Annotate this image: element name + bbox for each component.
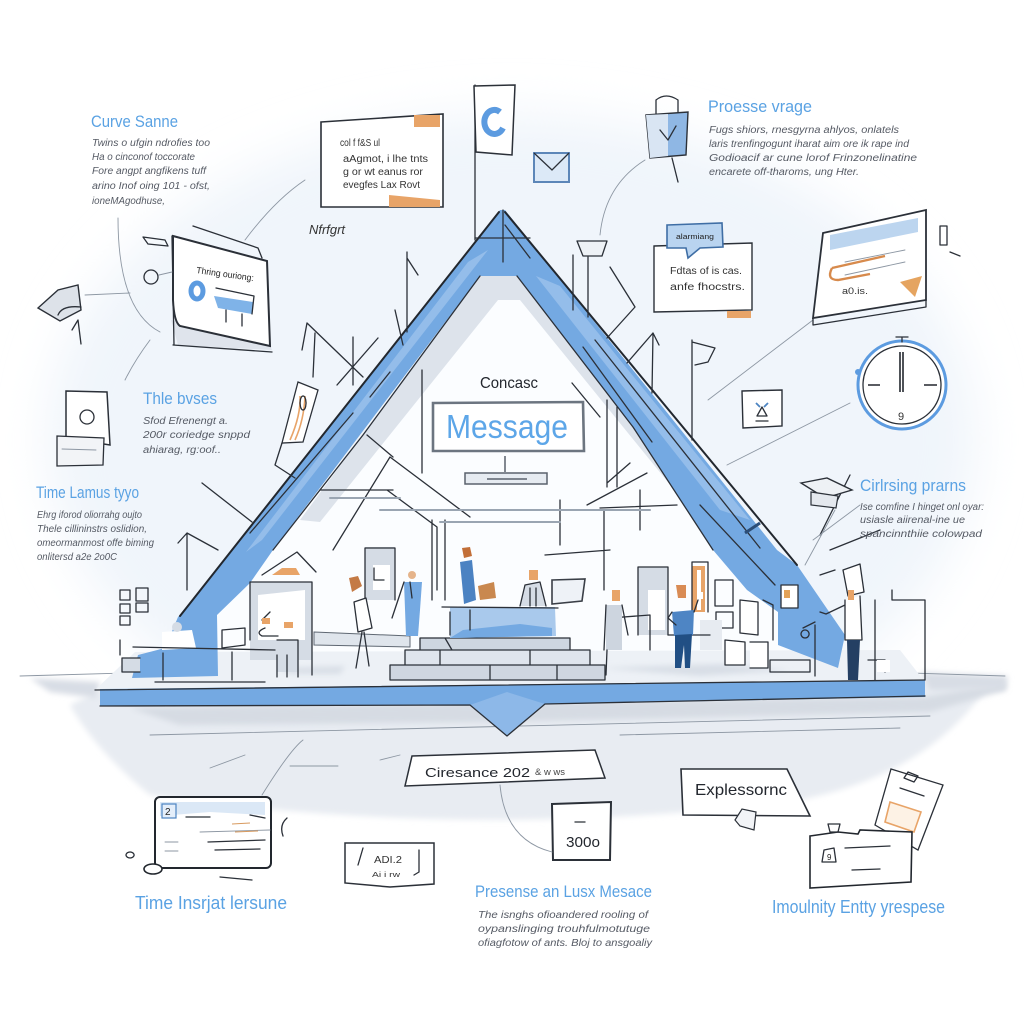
person: woman right of steps [604, 590, 628, 675]
sketch struts around roof [178, 241, 715, 590]
sign stand [465, 456, 547, 484]
note box [345, 843, 434, 887]
person: seated figure [478, 582, 496, 600]
speech card right top: alarmiang [676, 234, 714, 241]
poster on strut [282, 382, 318, 443]
reception counter [442, 579, 585, 638]
clipboard and folder icon [810, 769, 943, 888]
person: woman standing left [349, 576, 372, 668]
people [349, 547, 864, 680]
text block: cirlrsing prarns [860, 476, 984, 540]
message frame [433, 402, 584, 451]
label: concise: Concasc [480, 375, 538, 392]
3000 card [500, 785, 611, 860]
icon: wall clock [855, 337, 946, 429]
connector lines top right [600, 160, 860, 565]
text block: curve sanne: Curve Sanne [91, 112, 178, 131]
caption: time insrjat lersune: Time Insrjat lersune [135, 893, 287, 913]
note card top: evegfes Lax Rovt [343, 180, 420, 191]
person: man behind counter [520, 570, 546, 606]
icon: envelope [534, 153, 569, 182]
left chart board: Thring ouriong: [196, 265, 255, 283]
text block: proesse vrage: Fugs shiors, rnesgyrna ahlyos, onlatels [709, 125, 899, 136]
handwritten note: Nfrfgrt [309, 222, 346, 237]
platform floor [95, 650, 925, 690]
note card top: aAgmot, i lhe tnts [343, 154, 428, 165]
card bottom left [126, 740, 303, 880]
note box: ADI.2 [374, 855, 402, 866]
text block: thle bvses: ahiarag, rg:oof.. [143, 445, 221, 456]
clipboard and folder icon: 9 [827, 853, 832, 862]
note card top: g or wt eanus ror [343, 167, 424, 178]
text block: proesse vrage [708, 97, 918, 178]
speech card right top: anfe fhocstrs. [670, 282, 745, 293]
text block: presense an lusx mesace: ofiagfotow of ants. Bloj to ansgoaliy [478, 938, 653, 949]
text block: curve sanne [91, 112, 210, 207]
text block: thle bvses: Thle bvses [143, 389, 217, 408]
text block: time lamus: onlitersd a2e 2o0C [37, 552, 118, 563]
triangular roof frame [132, 210, 845, 678]
ground plane [20, 672, 1008, 820]
text block: proesse vrage: Proesse vrage [708, 97, 812, 116]
text block: curve sanne: Ha o cinconof toccorate [92, 152, 195, 163]
text block: time lamus: Thele cillininstrs oslidion, [37, 524, 147, 535]
text block: curve sanne: Twins o ufgin ndrofies too [92, 138, 210, 149]
flag pole [474, 85, 515, 240]
note card top [309, 114, 443, 237]
text block: proesse vrage: encarete off-tharoms, ung Hter. [709, 167, 859, 178]
floor shadow [280, 664, 790, 676]
icon: wall clock: 9 [898, 411, 904, 423]
text block: thle bvses: 200r coriedge snppd [142, 430, 251, 441]
icon: book mark left [57, 391, 110, 466]
note card top: col f f&S ul [340, 138, 380, 149]
text block: time lamus: Time Lamus tyyo [36, 483, 139, 502]
text block: thle bvses: Sfod Efrenengt a. [143, 416, 228, 427]
person: man in blue suit [392, 571, 422, 636]
text block: cirlrsing prarns: usiasle aiirenal-ine ue [860, 515, 965, 526]
right interior furniture [610, 475, 925, 680]
text block: cirlrsing prarns: Cirlrsing prarns [860, 476, 966, 495]
person: man at counter [460, 547, 476, 604]
text block: presense an lusx mesace: The isnghs ofioandered rooling of [478, 910, 649, 921]
screen card right [813, 210, 960, 325]
person: man in blue waving [668, 585, 703, 668]
text block: time lamus: omeormanmost offe biming [37, 538, 154, 549]
text block: time lamus [36, 483, 154, 563]
card bottom left: 2 [165, 807, 171, 818]
person: chef with tall hat [820, 564, 864, 680]
left chart board [85, 180, 305, 380]
text block: presense an lusx mesace: oypanslinging trouhfulmotutuge [478, 924, 651, 935]
icon: padlock [646, 96, 688, 182]
explessornc sign [681, 769, 810, 830]
text block: time lamus: Ehrg iforod oliorrahg oujto [37, 510, 142, 521]
icon: graduation cap right [801, 478, 852, 508]
ribbon banner: Ciresance 202 [425, 765, 530, 780]
concise label and message sign [433, 375, 584, 484]
central steps [390, 638, 605, 680]
ribbon banner: & w ws [535, 767, 566, 777]
icon: graduation cap left [38, 285, 81, 344]
ribbon banner [405, 750, 605, 786]
text block: proesse vrage: Godioacif ar cune lorof Frinzonelinatine [709, 153, 918, 164]
text block: curve sanne: ioneMAgodhuse, [92, 196, 165, 207]
3000 card: 300o [566, 834, 600, 851]
blue floor strip with central arrow [95, 680, 925, 736]
text block: presense an lusx mesace [475, 882, 653, 949]
caption: imoulnity entty yrespese: Imoulnity Entty yrespese [772, 897, 945, 917]
interior hall lines [320, 370, 775, 600]
explessornc sign: Explessornc [695, 782, 787, 799]
message text: Message [446, 408, 568, 445]
text block: cirlrsing prarns: Ise comfine I hinget onl oyar: [860, 502, 984, 513]
text block: cirlrsing prarns: spancinnthiie colowpad [860, 529, 983, 540]
text block: thle bvses [142, 389, 251, 456]
screen card right: a0.is. [842, 286, 868, 296]
triangle interior [190, 276, 820, 660]
text block: proesse vrage: laris trenfingogunt iharat aim ore ik rape ind [709, 139, 909, 150]
left interior furniture [120, 547, 410, 682]
text block: curve sanne: arino Inof oing 101 - ofst, [92, 181, 210, 192]
text block: presense an lusx mesace: Presense an Lusx Mesace [475, 882, 652, 901]
speech card right top [654, 223, 752, 318]
icon: small face card [742, 390, 782, 428]
speech card right top: Fdtas of is cas. [670, 266, 742, 277]
note box: Ai i rw [372, 872, 401, 879]
text block: curve sanne: Fore angpt angfikens tuff [92, 166, 207, 177]
